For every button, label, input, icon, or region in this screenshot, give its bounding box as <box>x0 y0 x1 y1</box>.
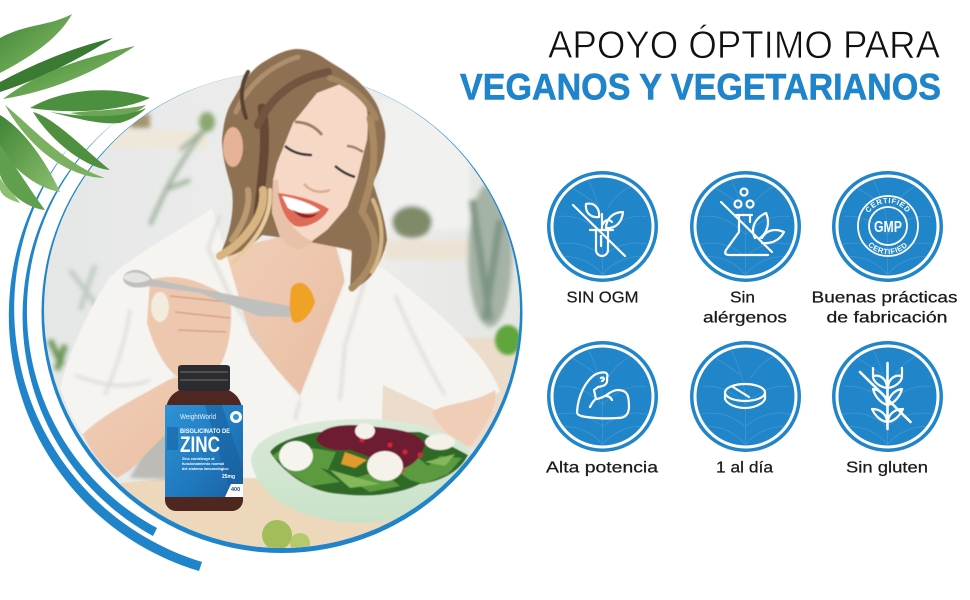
label: Sin <box>730 290 755 306</box>
label: 1 al día <box>716 460 773 476</box>
table <box>382 337 518 449</box>
icon: GMP stamp: GMP <box>874 219 902 236</box>
benefit: Alta potencia <box>546 341 658 476</box>
blurred room details <box>50 100 512 370</box>
badge <box>832 171 943 282</box>
woman body <box>60 208 500 480</box>
beetroot <box>316 425 425 468</box>
badge <box>547 171 658 282</box>
badge <box>547 341 658 452</box>
icon: flask with leaves, crossed out <box>721 188 784 255</box>
bottle body <box>165 390 243 511</box>
face <box>272 83 368 250</box>
salad bowl <box>251 419 470 523</box>
greens <box>270 432 468 496</box>
eyes and brows <box>295 122 322 135</box>
icon: tablet <box>725 384 765 408</box>
green item on table <box>495 325 521 355</box>
fork <box>123 270 290 317</box>
circular photo border <box>42 72 522 553</box>
icon: GMP stamp <box>857 195 919 257</box>
shoulder behind hair <box>344 248 386 252</box>
benefit: Buenas prácticas de fabricación: de fabricación <box>826 310 948 326</box>
label dose: 25mg <box>222 474 235 480</box>
supplement bottle: del sistema inmunológico <box>182 467 229 471</box>
shirt folds <box>75 215 445 420</box>
hair strands <box>220 57 382 288</box>
ring <box>151 292 169 322</box>
supplement bottle <box>165 365 243 511</box>
benefit: Sin gluten <box>832 341 943 476</box>
label: Alta potencia <box>546 460 658 476</box>
icon: test tube with plant, crossed out <box>573 204 625 256</box>
label badge <box>230 411 242 423</box>
jaw shade <box>272 180 313 250</box>
label subtitle: BISGLICINATO DE <box>180 428 231 435</box>
label count <box>225 484 243 497</box>
bottle label <box>165 405 243 497</box>
neck and chest <box>225 225 345 395</box>
benefit: 1 al día <box>690 341 801 476</box>
icon: GMP stamp: CERTIFIED <box>866 198 910 212</box>
badge <box>832 341 943 452</box>
bowl body <box>251 419 470 523</box>
ear <box>223 127 243 167</box>
woman head <box>218 49 387 290</box>
badge <box>690 341 801 452</box>
icon: flexed arm <box>577 372 629 418</box>
benefit: Buenas prácticas de fabricación <box>812 171 958 326</box>
left forearm <box>82 377 180 478</box>
cheese <box>279 441 313 471</box>
label product name: ZINC <box>180 432 220 457</box>
title line 1: APOYO ÓPTIMO PARA <box>548 24 940 67</box>
supplement bottle: funcionamiento normal <box>182 462 224 466</box>
nose shadow <box>304 184 330 192</box>
shadow under arm <box>130 434 165 481</box>
mouth <box>278 193 329 227</box>
photo background wall <box>40 70 530 560</box>
supplement bottle: 400 <box>231 487 240 493</box>
label: Sin gluten <box>846 460 928 476</box>
benefit: Sin alérgenos <box>690 171 801 326</box>
photo: woman eating salad <box>40 70 530 560</box>
badge <box>690 171 801 282</box>
pomegranate seeds <box>360 438 422 472</box>
label claims: Zinc contribuye al <box>182 457 214 461</box>
right hand <box>432 390 495 447</box>
benefit: SIN OGM <box>547 171 658 306</box>
brussels sprouts <box>262 520 292 550</box>
outer decorative arc <box>9 146 202 571</box>
hair back <box>218 49 387 290</box>
icon: wheat, crossed out <box>860 363 910 429</box>
food on fork <box>290 283 315 323</box>
label brand: WeightWorld <box>180 414 216 421</box>
label: Buenas prácticas <box>812 290 958 306</box>
icon: GMP stamp: CERTIFIED <box>868 242 907 254</box>
bottle cap <box>178 365 230 391</box>
hand with fork <box>147 277 231 382</box>
middle decorative arc <box>23 118 157 536</box>
palm leaves <box>0 14 150 210</box>
label: SIN OGM <box>566 290 638 306</box>
benefit: Sin alérgenos: alérgenos <box>703 310 787 326</box>
shirt <box>60 208 500 478</box>
